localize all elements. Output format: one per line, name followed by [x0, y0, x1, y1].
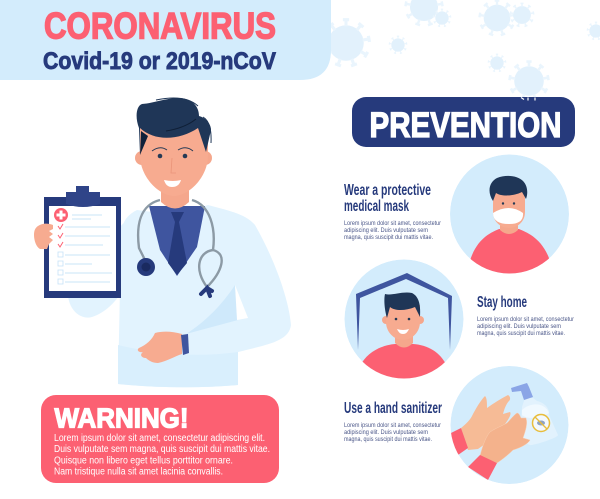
doctor face — [158, 154, 162, 158]
doctor hand and cuff — [138, 332, 182, 363]
red cross badge — [54, 208, 68, 222]
text: sanitizer — [344, 400, 442, 443]
warning text: Nam tristique nulla sit amet lacinia convallis. — [54, 466, 223, 478]
text: sanitizer: Use a hand sanitizer — [344, 400, 442, 417]
doctor shirt and tie — [149, 206, 205, 276]
right hand — [480, 413, 530, 463]
left hand — [461, 395, 511, 450]
lab coat — [118, 205, 291, 387]
text: sanitizer: adipiscing elit. Duis vulputate sem — [344, 429, 428, 436]
warning heading: WARNING! — [54, 402, 188, 434]
clipboard — [34, 186, 121, 298]
header panel — [0, 0, 331, 80]
warning text: Lorem ipsum dolor sit amet, consectetur adipiscing elit. — [54, 433, 265, 444]
warning text: Quisque non libero eget tellus porttitor ornare. — [54, 456, 233, 466]
icon: person wearing mask — [450, 154, 569, 274]
doctor illustration — [68, 98, 291, 387]
doctor far arm — [68, 222, 125, 318]
sleeves — [451, 428, 468, 455]
text: stay home: Stay home — [477, 294, 527, 311]
check marks — [58, 224, 63, 247]
panel: warning — [41, 395, 279, 483]
text: stay home: magna, quis suscipit dui mattis vitae. — [477, 330, 565, 337]
warning text — [54, 433, 270, 478]
text: mask: magna, quis suscipit dui mattis vitae. — [344, 234, 433, 241]
prevention banner: PREVENTION — [370, 105, 562, 145]
clipboard hand — [34, 224, 53, 249]
text: mask: Lorem ipsum dolor sit amet, consectetur — [344, 220, 441, 227]
stethoscope — [138, 200, 222, 287]
text: stay home — [477, 294, 574, 337]
text: sanitizer: Lorem ipsum dolor sit amet, consectetur — [344, 422, 441, 429]
doctor hair — [137, 98, 211, 155]
text: mask: Wear a protective — [344, 182, 431, 199]
text: mask: medical mask — [344, 198, 409, 215]
prevention banner — [352, 97, 575, 147]
icon: person at home — [344, 260, 464, 385]
background virus pattern — [323, 0, 600, 100]
sanitizer bottle — [520, 398, 558, 445]
subtitle: Covid-19 or 2019-nCoV — [43, 48, 276, 75]
checklist lines — [65, 215, 112, 282]
title: CORONAVIRUS — [44, 6, 276, 46]
checkboxes — [58, 252, 63, 284]
text: mask — [344, 182, 441, 241]
icon: sanitizer and hands — [450, 366, 568, 484]
warning text: Duis vulputate sem magna, quis suscipit dui mattis vitae. — [54, 444, 270, 455]
text: stay home: adipiscing elit. Duis vulputate sem — [477, 323, 561, 330]
text: mask: adipiscing elit. Duis vulputate sem — [344, 227, 428, 234]
text: sanitizer: magna, quis suscipit dui mattis vitae. — [344, 436, 432, 443]
text: stay home: Lorem ipsum dolor sit amet, consectetur — [477, 316, 574, 323]
neck and head — [161, 180, 189, 208]
